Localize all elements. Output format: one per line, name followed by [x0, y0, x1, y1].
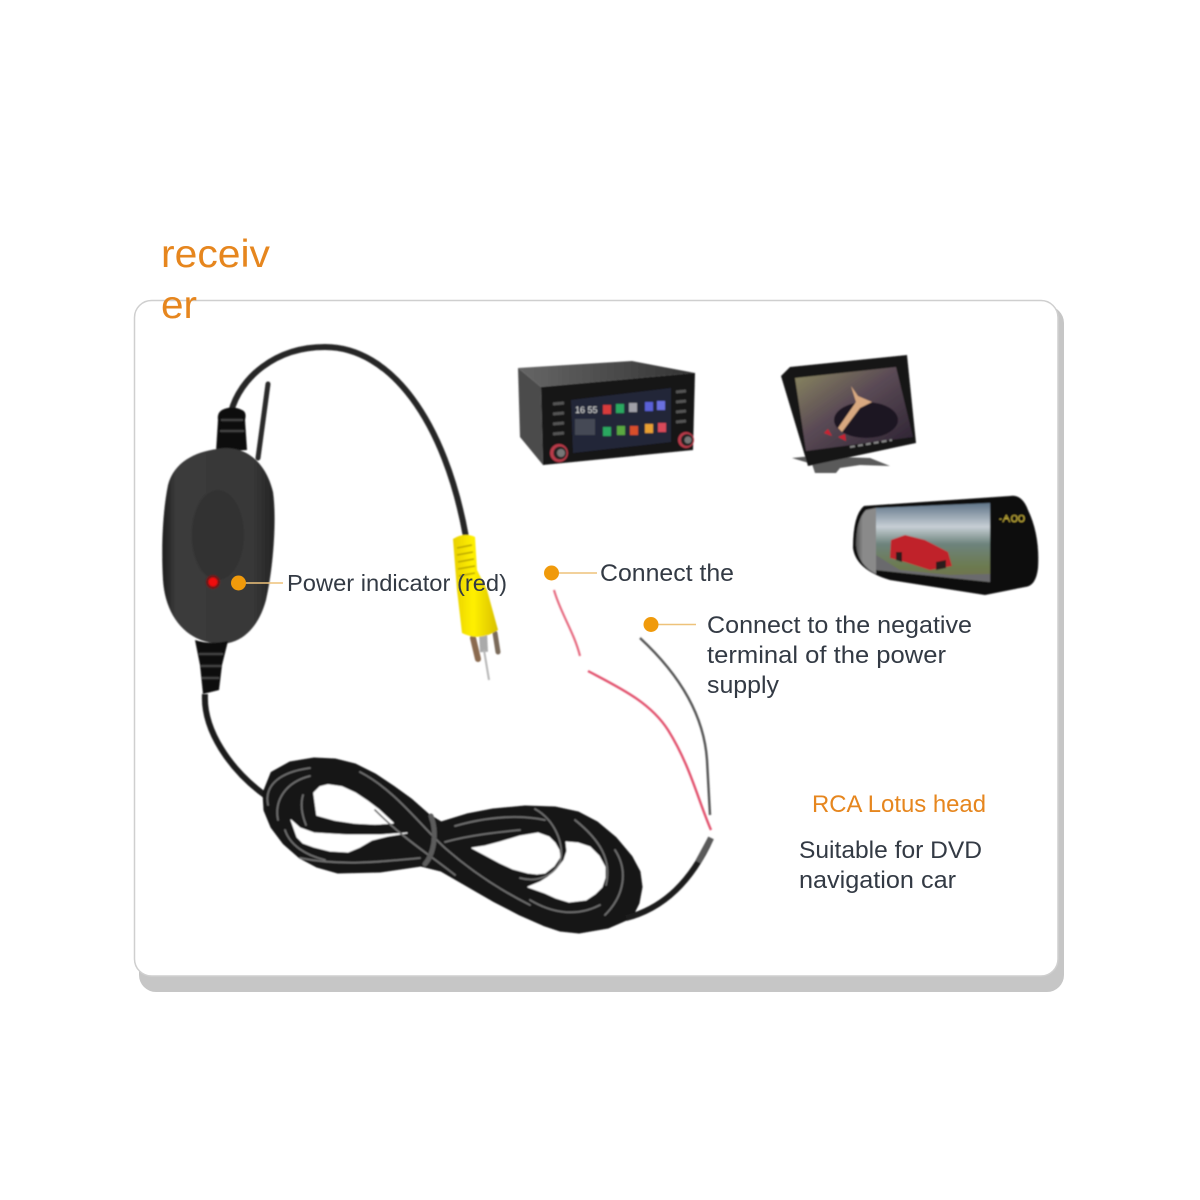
receiver body — [162, 448, 275, 644]
title: second line: er — [161, 284, 197, 327]
lower strain relief — [195, 640, 228, 694]
mirror indicator text: -ᗅOO — [999, 514, 1025, 525]
callout: connect the — [544, 560, 734, 587]
coil highlights — [267, 768, 623, 915]
power LED — [206, 575, 220, 589]
heading: RCA Lotus head: RCA Lotus head — [812, 791, 986, 818]
text block: suitable for — [799, 837, 982, 894]
monitor stand — [792, 456, 890, 473]
text block: suitable for: navigation car — [799, 867, 956, 894]
left knob — [550, 444, 568, 462]
red car — [890, 535, 952, 570]
red shoes — [824, 429, 846, 441]
unit screen — [571, 388, 671, 453]
callout: negative terminal — [644, 612, 972, 699]
antenna — [258, 384, 268, 458]
icon: rearview mirror monitor — [853, 496, 1038, 595]
lead to wires — [626, 838, 711, 918]
coil opening: lower left — [291, 820, 407, 852]
title: receiver: receiv — [161, 233, 271, 276]
mirror shell — [853, 496, 1038, 595]
screen clock: 16 55 — [575, 405, 598, 415]
callout: negative terminal: supply — [707, 672, 779, 699]
monitor screen — [795, 367, 913, 451]
figure on screen — [838, 386, 872, 432]
side buttons — [553, 391, 686, 434]
icon: wireless receiver with RCA plug — [162, 347, 498, 694]
coil silhouette — [264, 759, 641, 932]
unit front — [541, 373, 695, 465]
black wire — [640, 638, 710, 815]
app icons — [575, 401, 666, 436]
text block: suitable for: Suitable for DVD — [799, 837, 982, 864]
callout: negative terminal: terminal of the power — [707, 642, 946, 669]
unit top — [518, 361, 695, 387]
coil opening: outer right loop — [528, 842, 605, 902]
icon: coiled black cable — [205, 590, 711, 932]
RCA yellow sleeve — [453, 535, 498, 637]
lead to coil — [205, 694, 266, 796]
body recess — [192, 490, 244, 580]
unit side — [518, 368, 543, 465]
callout: negative terminal: Connect to the negative — [707, 612, 972, 639]
car on screen — [834, 402, 898, 438]
red wire upper piece — [554, 590, 580, 656]
cable tie — [425, 816, 434, 864]
car wheels — [896, 552, 946, 570]
red wire lower piece — [588, 671, 711, 830]
road — [876, 555, 990, 582]
upper strain relief — [216, 408, 247, 452]
coil opening: upper left — [314, 785, 393, 824]
upper cable — [231, 347, 466, 537]
coil opening: inner right loop — [472, 833, 560, 874]
sheath end — [698, 838, 711, 862]
icon: dashboard monitor — [781, 355, 916, 473]
monitor sun hood — [781, 355, 916, 466]
monitor buttons — [850, 440, 892, 447]
RCA metal pins — [473, 632, 498, 680]
right knob — [678, 432, 694, 448]
callout: connect the: Connect the — [600, 560, 734, 587]
mirror screen — [876, 503, 990, 582]
icon: car DVD head unit — [518, 361, 695, 465]
callout: power indicator: Power indicator (red) — [287, 570, 507, 596]
panel: receiver card — [134, 300, 1064, 992]
mirror grey bezel — [856, 508, 876, 574]
